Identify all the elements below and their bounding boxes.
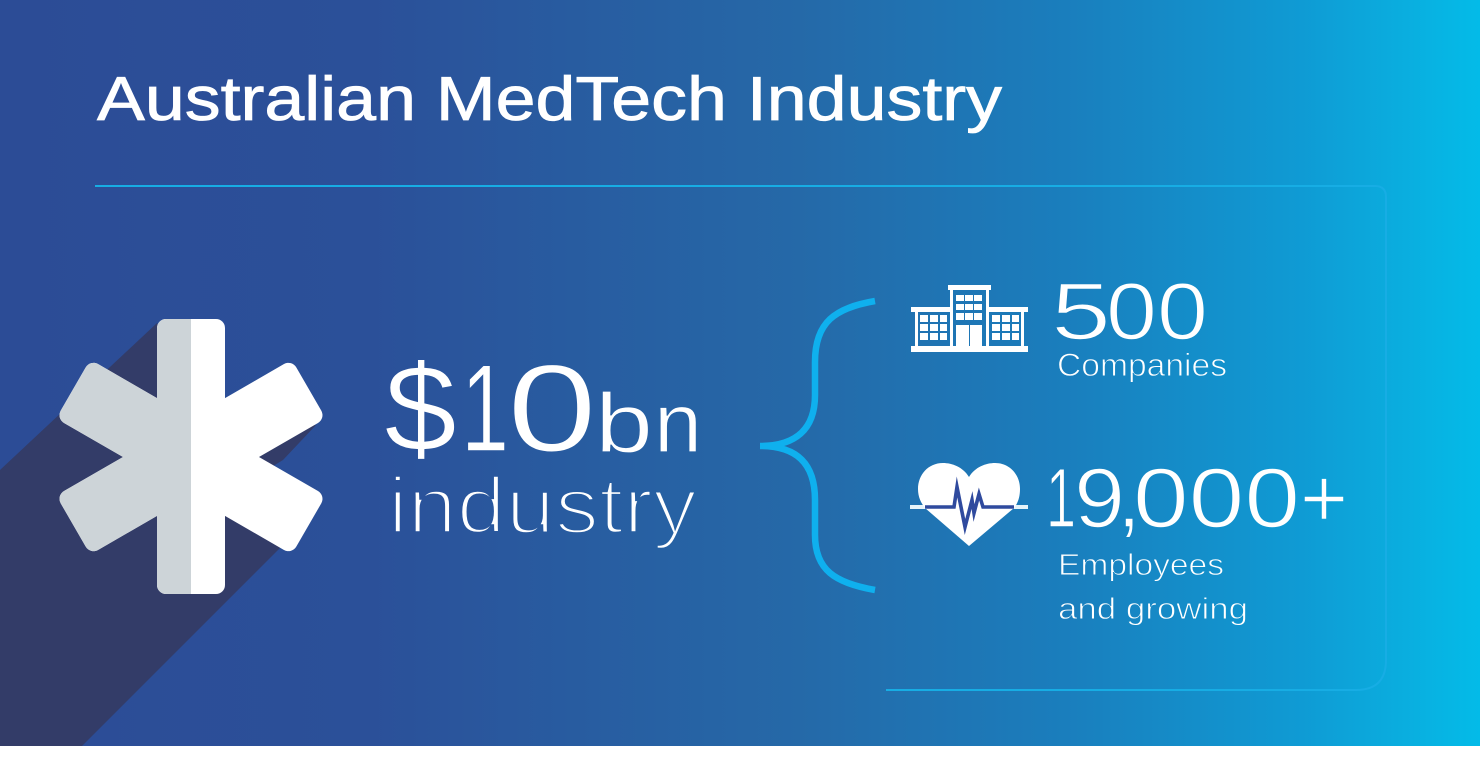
- stat: 500 companies: [1051, 267, 1227, 383]
- stat: 500 companies: 5: [1051, 267, 1111, 357]
- stat: 19,000+ employees: 000: [1133, 451, 1300, 545]
- title: Australian MedTech Industry: [97, 65, 1002, 134]
- curly brace: [760, 301, 875, 590]
- icon: heart with pulse: [910, 463, 1028, 546]
- stat: 500 companies: 00: [1106, 267, 1208, 357]
- headline: $10bn industry: $: [384, 340, 457, 478]
- stat: 19,000+ employees: Employees: [1058, 547, 1224, 582]
- stat: 19,000+ employees: 9: [1074, 451, 1125, 545]
- stat: 19,000+ employees: and growing: [1058, 591, 1248, 626]
- headline: $10bn industry: b: [595, 376, 653, 470]
- stat: 19,000+ employees: [1046, 451, 1348, 626]
- headline: $10bn industry: 1: [461, 340, 509, 478]
- icon: hospital building: [911, 285, 1028, 352]
- headline: $10bn industry: 0: [507, 340, 597, 478]
- headline: $10bn industry: n: [654, 376, 702, 470]
- stat: 19,000+ employees: ,: [1117, 451, 1141, 545]
- panel outline: [95, 186, 1386, 690]
- headline: $10bn industry: industry: [388, 461, 697, 550]
- long shadow of asterisk: [0, 323, 316, 746]
- stat: 19,000+ employees: +: [1300, 451, 1348, 545]
- stat: 19,000+ employees: 1: [1046, 451, 1076, 545]
- headline: $10bn industry: [384, 340, 702, 550]
- icon: medical asterisk: [56, 319, 326, 594]
- stat: 500 companies: Companies: [1057, 347, 1227, 383]
